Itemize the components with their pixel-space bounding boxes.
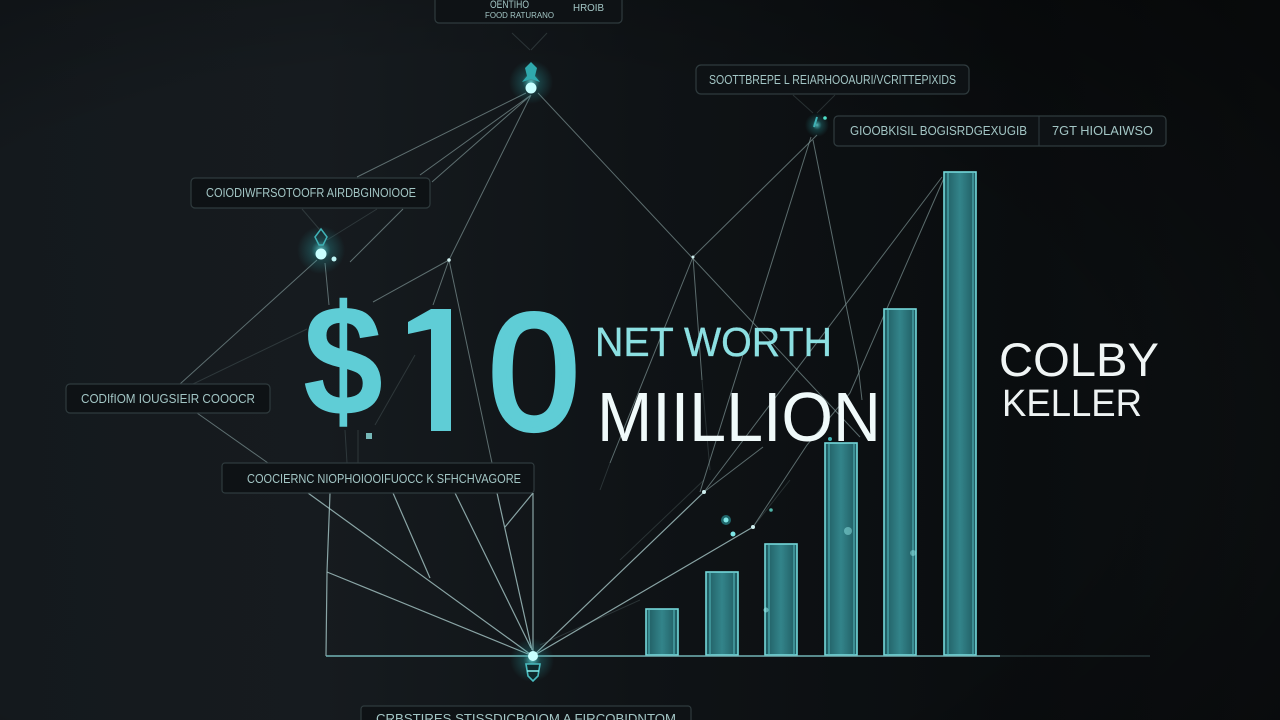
node: left	[297, 226, 345, 274]
label: left upper	[191, 178, 430, 208]
name: colby keller: KELLER	[1002, 383, 1142, 425]
label: left lower: COOCIERNC NIOPHOIOOIFUOCC K SFHCHVAGORE	[247, 472, 521, 486]
label: left upper: COIODIWFRSOTOOFR AIRDBGINOIOOE	[206, 186, 416, 200]
node: top	[509, 60, 553, 104]
label: upper right two	[834, 116, 1166, 146]
label: upper right two: GIOOBKISIL BOGISRDGEXUGIB	[850, 124, 1027, 138]
network lines	[180, 33, 944, 656]
headline: $10: 0	[489, 280, 579, 464]
bar chart	[326, 172, 1000, 656]
name: colby keller: COLBY	[999, 333, 1159, 386]
label: bottom	[361, 706, 691, 720]
bar 3	[765, 544, 797, 655]
label: top: HROIB	[573, 2, 604, 14]
heading: net worth: NET WORTH	[595, 319, 832, 365]
label: upper right one	[696, 65, 969, 94]
bar 2	[706, 572, 738, 655]
headline: $10	[304, 298, 576, 434]
label: upper right one: SOOTTBREPE L REIARHOOAURI/VCRITTEPIXIDS	[709, 73, 956, 87]
bar 1	[646, 609, 678, 655]
label: upper right two: 7GT HIOLAIWSO	[1052, 124, 1153, 138]
name: colby keller	[999, 333, 1159, 425]
label: top	[435, 0, 622, 23]
node: bottom	[510, 638, 554, 682]
label: left lower	[222, 463, 534, 493]
small nodes	[366, 256, 916, 612]
headline: $10: 1	[392, 273, 490, 469]
heading: million: MIILLION	[597, 378, 881, 456]
label: left middle: CODIfIOM IOUGSIEIR COOOCR	[81, 392, 255, 406]
label: left middle	[66, 384, 270, 413]
bar 4	[825, 443, 857, 655]
node: upper right	[805, 113, 829, 137]
bar 6	[944, 172, 976, 655]
baseline fade	[1000, 655, 1150, 657]
bar 5	[884, 309, 916, 655]
baseline	[326, 655, 1000, 657]
headline: $10: $	[303, 273, 383, 449]
label: top: FOOD RATURANO	[485, 10, 554, 20]
